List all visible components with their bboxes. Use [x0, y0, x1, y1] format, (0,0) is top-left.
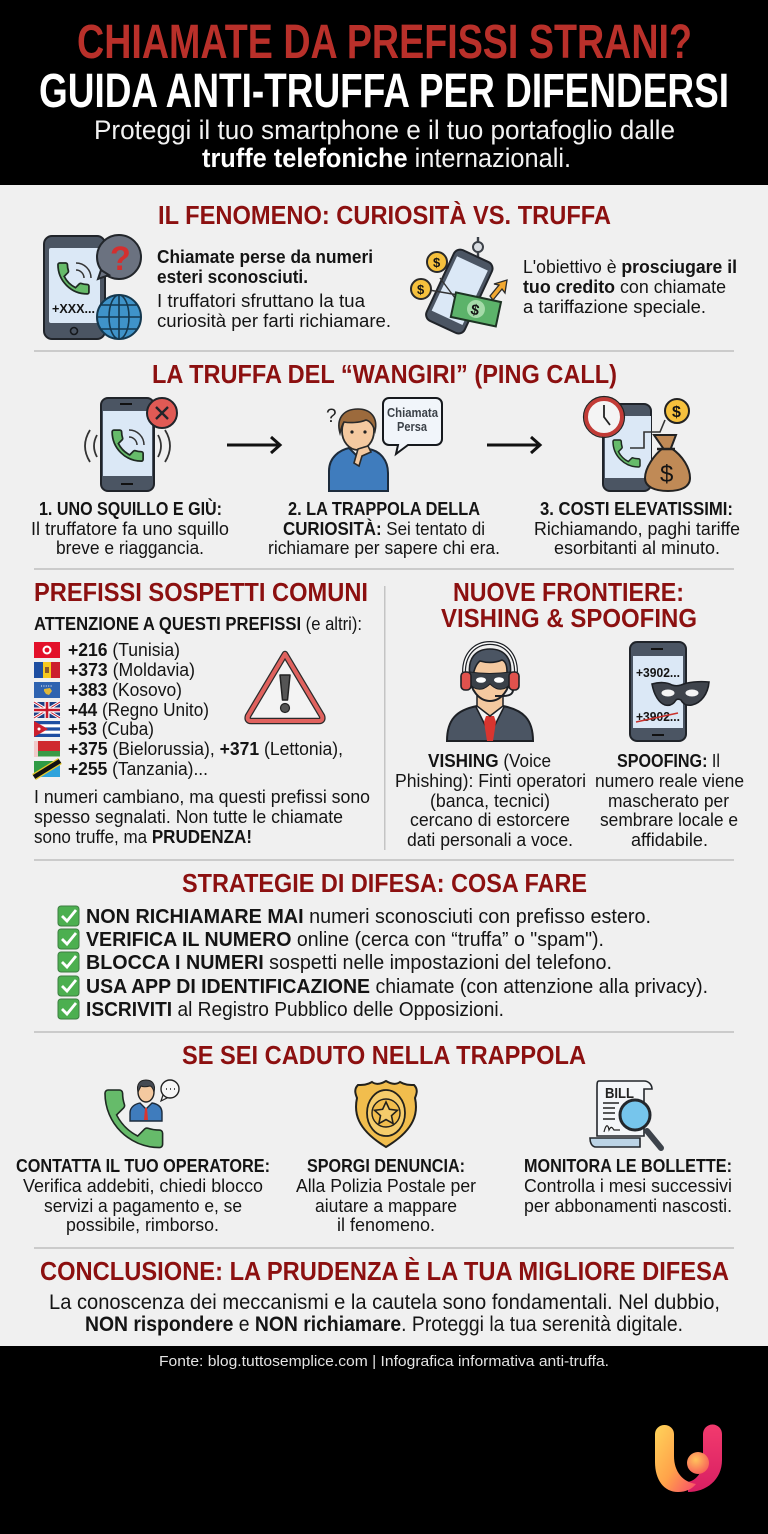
text: vishing: (banca, tecnici) [430, 790, 550, 811]
flag: moldova [34, 662, 60, 678]
icon: thinking person with speech bubble [326, 398, 442, 491]
strategy list: NON RICHIAMARE MAI numeri sconosciuti con prefisso estero. [86, 905, 651, 928]
step 1 text [31, 498, 229, 558]
conclusion text [49, 1291, 720, 1336]
footer source: Fonte: blog.tuttosemplice.com | Infografica informativa anti-truffa. [159, 1353, 609, 1370]
prefix list: +375 (Bielorussia), +371 (Lettonia), [68, 738, 343, 759]
panel: se sei caduto nella trappola [16, 1040, 732, 1235]
text: sporgi denuncia: Alla Polizia Postale per [296, 1175, 476, 1196]
text: contatta operatore [16, 1155, 270, 1235]
check icons [58, 906, 79, 1019]
text: contatta operatore: servizi a pagamento e, se [44, 1195, 242, 1216]
text: vishing: VISHING (Voice [428, 750, 551, 771]
text: obiettivo: tuo credito con chiamate [523, 276, 726, 297]
step 1 text: 1. UNO SQUILLO E GIÙ: [39, 498, 222, 519]
logo [655, 1424, 722, 1492]
icon: bill with magnifier: BILL [605, 1085, 634, 1102]
step 3 text [534, 498, 740, 558]
flag: belarus [34, 741, 60, 757]
text: spoofing: numero reale viene [595, 770, 744, 791]
text: spoofing: mascherato per [608, 790, 729, 811]
icon: hooked phone with money: $ [433, 255, 441, 270]
icon: phone and operator [105, 1080, 179, 1148]
step 2 text [268, 498, 500, 558]
heading: trappola: SE SEI CADUTO NELLA TRAPPOLA [182, 1040, 586, 1070]
text: monitora bollette: Controlla i mesi successivi [524, 1175, 732, 1196]
text: monitora bollette: MONITORA LE BOLLETTE: [524, 1155, 732, 1176]
flag: kosovo [34, 682, 60, 698]
text: chiamate perse: esteri sconosciuti. [157, 266, 308, 287]
heading: il fenomeno: IL FENOMENO: CURIOSITÀ VS. TRUFFA [158, 200, 611, 230]
flag: tunisia [34, 642, 60, 658]
strategy list [86, 905, 708, 1021]
text: monitora bollette: per abbonamenti nascosti. [524, 1195, 732, 1216]
icon: phone with question mark and globe: +XXX... [52, 302, 95, 316]
content background panel [0, 185, 768, 1346]
strategy list: ISCRIVITI al Registro Pubblico delle Opposizioni. [86, 998, 504, 1021]
text: obiettivo: a tariffazione speciale. [523, 296, 706, 317]
text: contatta operatore: Verifica addebiti, chiedi blocco [23, 1175, 263, 1196]
text: vishing: dati personali a voce. [407, 829, 573, 850]
flag: united kingdom [34, 702, 60, 718]
icon: hooked phone with money: $ [469, 301, 481, 320]
subtitle: truffe telefoniche internazionali. [202, 143, 571, 173]
text: monitora bollette [524, 1155, 732, 1216]
heading: nuove frontiere: NUOVE FRONTIERE: [453, 577, 684, 607]
text: spoofing [595, 750, 744, 850]
conclusion text: La conoscenza dei meccanismi e la cautela sono fondamentali. Nel dubbio, [49, 1291, 720, 1314]
icon: ringing phone with red x [85, 398, 177, 491]
warning paragraph: spesso segnalati. Non tutte le chiamate [34, 806, 343, 827]
flag: tanzania [34, 761, 60, 777]
step 3 text: esorbitanti al minuto. [554, 537, 720, 558]
text: sporgi denuncia: SPORGI DENUNCIA: [307, 1155, 465, 1176]
text: vishing: Phishing): Finti operatori [395, 770, 586, 791]
prefix list: +216 (Tunisia) [68, 639, 180, 660]
strategy list: VERIFICA IL NUMERO online (cerca con “truffa” o "spam"). [86, 928, 604, 951]
step 2 text: richiamare per sapere chi era. [268, 537, 500, 558]
icon: clock, phone and money bag: $ [672, 404, 681, 421]
text: contatta operatore: CONTATTA IL TUO OPERATORE: [16, 1155, 270, 1176]
arrow [487, 437, 540, 453]
text: spoofing: SPOOFING: Il [617, 750, 720, 771]
warning paragraph: sono truffe, ma PRUDENZA! [34, 826, 252, 847]
heading: prefissi sospetti: PREFISSI SOSPETTI COMUNI [34, 577, 368, 607]
panel: il fenomeno [44, 200, 737, 339]
heading: strategie: STRATEGIE DI DIFESA: COSA FARE [182, 868, 587, 898]
panel: vishing e spoofing [395, 577, 744, 850]
text: contatta operatore: possibile, rimborso. [66, 1214, 219, 1235]
panel: strategie di difesa [58, 868, 708, 1021]
strategy list: USA APP DI IDENTIFICAZIONE chiamate (con attenzione alla privacy). [86, 975, 708, 998]
prefix list: +44 (Regno Unito) [68, 699, 209, 720]
icon: warning triangle [248, 654, 322, 721]
prefix list: +383 (Kosovo) [68, 679, 182, 700]
panel: prefissi sospetti [34, 577, 370, 847]
icon: clock, phone and money bag: $ [660, 461, 673, 488]
subtitle: Proteggi il tuo smartphone e il tuo portafoglio dalle [94, 115, 675, 145]
prefix list: +53 (Cuba) [68, 718, 154, 739]
icon: thinking person with speech bubble: Chiamata [387, 406, 439, 420]
subtitle [94, 115, 675, 173]
icon: spoofing phone with mask: +3902... [636, 710, 680, 724]
step 2 text: 2. LA TRAPPOLA DELLA [288, 498, 480, 519]
heading: wangiri: LA TRUFFA DEL “WANGIRI” (PING CALL) [152, 359, 617, 389]
step 1 text: breve e riaggancia. [56, 537, 204, 558]
step 2 text: CURIOSITÀ: Sei tentato di [283, 518, 485, 539]
icon: spoofing phone with mask: +3902... [636, 666, 680, 680]
prefix list [68, 639, 343, 779]
warning paragraph: I numeri cambiano, ma questi prefissi sono [34, 786, 370, 807]
prefix list: +373 (Moldavia) [68, 659, 195, 680]
icon: masked call operator [447, 643, 533, 741]
icon: spoofing phone with mask [630, 642, 709, 741]
arrow [227, 437, 280, 453]
text: sporgi denuncia: aiutare a mappare [315, 1195, 457, 1216]
text: vishing [395, 750, 586, 850]
text: sporgi denuncia [296, 1155, 476, 1235]
step 3 text: 3. COSTI ELEVATISSIMI: [540, 498, 733, 519]
text: vishing: cercano di estorcere [410, 809, 570, 830]
text: chiamate perse: I truffatori sfruttano la tua [157, 290, 366, 311]
icon: police badge [355, 1081, 417, 1147]
panel: wangiri [31, 359, 740, 558]
text: sporgi denuncia: il fenomeno. [337, 1214, 435, 1235]
icon: phone with question mark and globe [44, 235, 141, 339]
icon: hooked phone with money [411, 237, 507, 336]
text: spoofing: affidabile. [631, 829, 708, 850]
list intro: ATTENZIONE A QUESTI PREFISSI (e altri): [34, 613, 362, 634]
header [39, 16, 729, 173]
step 1 text: Il truffatore fa uno squillo [31, 518, 229, 539]
icon: clock, phone and money bag [584, 396, 690, 491]
text: obiettivo [523, 256, 737, 317]
conclusion text: NON rispondere e NON richiamare. Proteggi la tua serenità digitale. [85, 1313, 683, 1336]
step 3 text: Richiamando, paghi tariffe [534, 518, 740, 539]
icon: hooked phone with money: $ [417, 282, 425, 297]
panel: conclusione [40, 1256, 729, 1336]
icon: phone with question mark and globe: ? [110, 240, 131, 278]
text: obiettivo: L'obiettivo è prosciugare il [523, 256, 737, 277]
text: spoofing: sembrare locale e [600, 809, 738, 830]
warning paragraph [34, 786, 370, 847]
text: chiamate perse [157, 246, 391, 331]
icon: thinking person with speech bubble: Persa [397, 420, 428, 434]
text: chiamate perse: Chiamate perse da numeri [157, 246, 373, 267]
heading: nuove frontiere [441, 577, 697, 633]
strategy list: BLOCCA I NUMERI sospetti nelle impostazioni del telefono. [86, 951, 612, 974]
prefix list: +255 (Tanzania)... [68, 758, 208, 779]
flag: cuba [34, 721, 60, 737]
text: chiamate perse: curiosità per farti richiamare. [157, 310, 391, 331]
icon: bill with magnifier [590, 1081, 661, 1148]
heading: nuove frontiere: VISHING & SPOOFING [441, 603, 697, 633]
icon: thinking person with speech bubble: ? [326, 406, 337, 427]
